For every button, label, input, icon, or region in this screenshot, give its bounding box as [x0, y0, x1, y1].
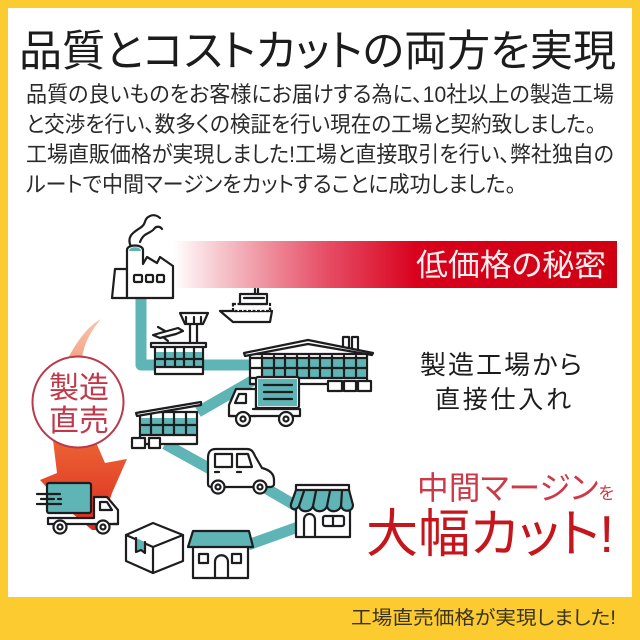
icon: shop — [291, 485, 353, 537]
handwritten note — [420, 350, 582, 414]
badge: factory direct — [32, 356, 124, 448]
icon: small warehouse — [132, 402, 201, 448]
body text: と交渉を行い、数多くの検証を行い現在の工場と契約致しました。 — [26, 112, 596, 137]
red banner: low price secret — [173, 241, 617, 288]
body text: 品質の良いものをお客様にお届けする為に、10社以上の製造工場 — [26, 82, 614, 107]
handwritten note: 製造工場から — [420, 350, 582, 380]
red message: margin cut — [366, 470, 614, 564]
body text: 工場直販価格が実現しました!工場と直接取引を行い、弊社独自の — [26, 142, 614, 167]
icon: ship — [220, 289, 272, 322]
icon: airport with plane and tower — [151, 313, 208, 374]
icon: delivery truck with cargo — [229, 377, 300, 426]
icon: large warehouse — [244, 337, 373, 391]
icon: factory — [112, 215, 173, 298]
red message: margin cut: 中間マージンを — [417, 470, 614, 506]
icon: factory-direct truck — [37, 483, 118, 534]
handwritten note: 直接仕入れ — [435, 386, 571, 414]
orange arrow — [40, 319, 127, 530]
red banner: low price secret: 低価格の秘密 — [416, 248, 606, 283]
body text: ルートで中間マージンをカットすることに成功しました。 — [26, 172, 516, 197]
icon: cardboard box — [126, 523, 183, 573]
icon: house — [188, 531, 253, 578]
teal route lines — [141, 298, 298, 545]
icon: van — [208, 449, 274, 494]
badge: factory direct: 直売 — [49, 405, 109, 438]
red message: margin cut: 大幅カット! — [366, 506, 614, 564]
title: 品質とコストカットの両方を実現 — [19, 28, 616, 76]
badge: factory direct: 製造 — [49, 372, 109, 405]
body text — [26, 82, 614, 197]
footer text: 工場直売価格が実現しました! — [351, 607, 616, 629]
